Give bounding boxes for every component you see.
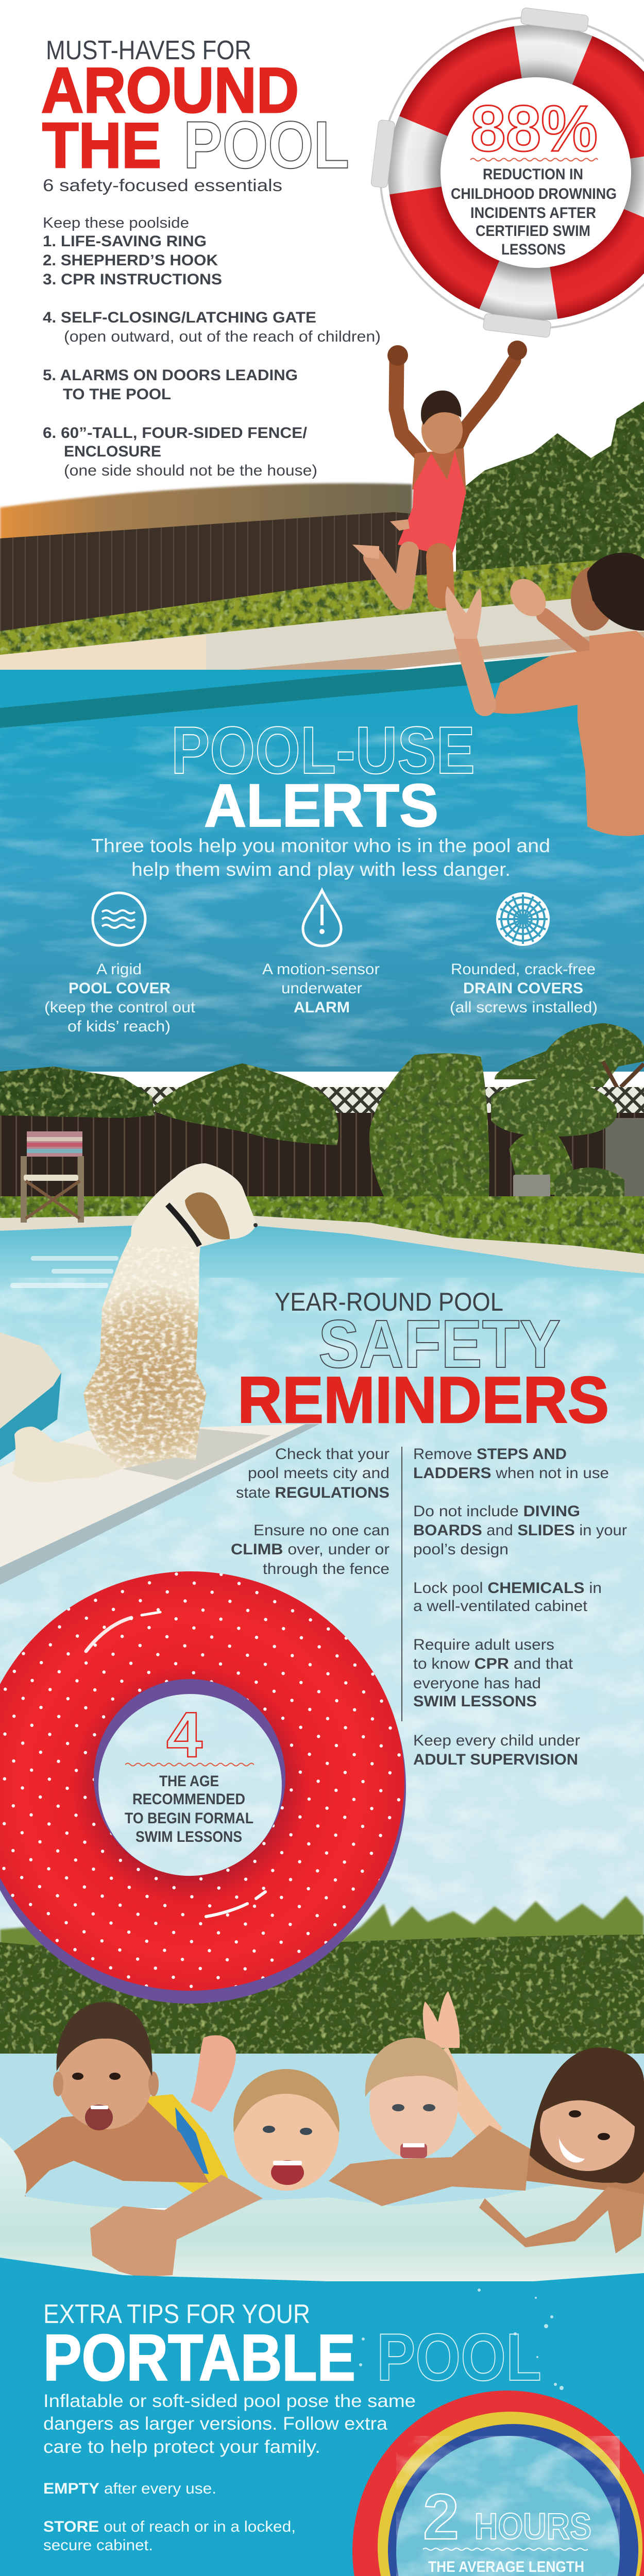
tool: alarm: A motion-sensor — [262, 961, 380, 978]
upper right tree — [495, 1023, 644, 1090]
reminders: left column: CLIMB over, under or — [231, 1541, 389, 1558]
reminders: right column — [413, 1446, 627, 1768]
intro text: portable pool dangers: care to help protect your family. — [43, 2437, 320, 2457]
stat caption: REDUCTION IN — [483, 166, 583, 183]
checklist: keep these poolside: TO THE POOL — [63, 386, 171, 403]
intro text: portable pool dangers: Inflatable or soft-sided pool pose the same — [43, 2391, 416, 2411]
floating red ring stat: age 4 — [0, 1571, 406, 2004]
reminders: right column: Do not include DIVING — [413, 1503, 580, 1520]
heading: year-round pool safety reminders: SAFETY — [318, 1306, 561, 1382]
reminders: left column: pool meets city and — [248, 1465, 389, 1482]
tool: drain covers: DRAIN COVERS — [463, 980, 583, 997]
checklist: keep these poolside: 2. SHEPHERD’S HOOK — [43, 252, 218, 269]
photo: dog sitting beside backyard pool — [0, 1023, 644, 1958]
heading: extra tips for your portable pool: POOL — [377, 2319, 541, 2395]
checklist: keep these poolside: 5. ALARMS ON DOORS LEADING — [43, 367, 298, 384]
tool: pool cover: A rigid — [96, 961, 142, 978]
stat caption: CHILDHOOD DROWNING — [451, 185, 617, 202]
checklist: keep these poolside — [43, 215, 381, 479]
checklist: keep these poolside: 3. CPR INSTRUCTIONS — [43, 271, 222, 288]
icon: pool cover waves — [93, 893, 145, 945]
stat caption: THE AGE — [159, 1773, 219, 1790]
raised foot and swim trunks — [144, 2035, 236, 2197]
stat caption: SWIM LESSONS — [135, 1828, 242, 1845]
deck — [0, 1424, 306, 1567]
child 1 — [0, 2002, 209, 2273]
heading: year-round pool safety reminders: YEAR-ROUND POOL — [275, 1287, 503, 1316]
heading: extra tips for your portable pool: EXTRA TIPS FOR YOUR — [43, 2299, 310, 2329]
checklist: keep these poolside: 4. SELF-CLOSING/LATCHING GATE — [43, 309, 316, 326]
heading: extra tips for your portable pool: PORTABLE — [43, 2321, 355, 2394]
stat caption — [125, 1773, 253, 1845]
reminders: right column: LADDERS when not in use — [413, 1465, 609, 1482]
portable pool tips list: STORE out of reach or in a locked, — [43, 2518, 296, 2535]
dog — [12, 1163, 258, 1482]
stat caption: RECOMMENDED — [132, 1791, 245, 1808]
reminders: left column: Check that your — [275, 1446, 389, 1463]
stat caption: LESSONS — [501, 241, 566, 258]
reminders: left column: through the fence — [263, 1561, 389, 1578]
intro text: portable pool dangers — [43, 2391, 416, 2457]
portable pool tips list: secure cabinet. — [43, 2537, 153, 2554]
round pool step — [0, 1372, 61, 1460]
checklist: keep these poolside: 6. 60”-TALL, FOUR-SIDED FENCE/ — [43, 425, 308, 442]
reminders: right column: pool’s design — [413, 1541, 509, 1558]
tool: drain covers: (all screws installed) — [450, 999, 598, 1016]
portable pool background — [0, 2258, 644, 2576]
stat caption: CERTIFIED SWIM — [476, 223, 590, 240]
heading: year-round pool safety reminders — [238, 1287, 609, 1436]
heading: pool-use alerts — [171, 713, 475, 840]
stat caption: THE AVERAGE LENGTH — [428, 2558, 584, 2575]
reminders: left column: Ensure no one can — [253, 1522, 389, 1539]
life ring stat: 88% — [355, 0, 644, 338]
title: must-haves for around the pool: 6 safety-focused essentials — [43, 176, 282, 195]
icon: drain cover — [496, 892, 550, 946]
inflatable pool rim — [0, 2137, 644, 2281]
kiddie pool stat: 2 hours — [352, 2391, 644, 2576]
intro text: three tools: Three tools help you monitor who is in the pool and — [91, 835, 550, 856]
title: must-haves for around the pool — [41, 36, 349, 195]
reminders: right column: to know CPR and that — [413, 1655, 573, 1672]
reminders: right column: Lock pool CHEMICALS in — [413, 1580, 602, 1597]
portable pool tips list — [43, 2480, 296, 2576]
tool: pool cover — [44, 961, 196, 1035]
icon: alarm drop — [303, 890, 341, 946]
reminders: left column: state REGULATIONS — [236, 1484, 389, 1501]
checklist: keep these poolside: ENCLOSURE — [64, 443, 161, 460]
reminders: right column: BOARDS and SLIDES in your — [413, 1522, 627, 1539]
heading: extra tips for your portable pool — [43, 2299, 541, 2395]
photo: girl jumping into pool with father — [0, 341, 644, 1072]
title: must-haves for around the pool: THE — [42, 110, 161, 181]
reminders: right column: ADULT SUPERVISION — [413, 1751, 578, 1768]
tool: alarm: underwater — [281, 980, 362, 997]
heading: pool-use alerts: ALERTS — [204, 772, 438, 840]
stat number: 4 — [166, 1700, 202, 1771]
child 2 — [90, 2069, 530, 2277]
reminders: right column: everyone has had — [413, 1675, 541, 1692]
tool: pool cover: of kids’ reach) — [67, 1018, 171, 1035]
reminders: right column: a well-ventilated cabinet — [413, 1598, 588, 1615]
tool: pool cover: (keep the control out — [44, 999, 196, 1016]
director's chair — [24, 1131, 82, 1223]
intro text: portable pool dangers: dangers as larger versions. Follow extra — [43, 2414, 388, 2434]
stat caption — [451, 166, 617, 258]
tool: drain covers: Rounded, crack-free — [451, 961, 596, 978]
tool: alarm: ALARM — [294, 999, 350, 1016]
girl — [352, 341, 527, 600]
reminders: right column: SWIM LESSONS — [413, 1693, 537, 1710]
heading: year-round pool safety reminders: REMINDERS — [238, 1363, 609, 1436]
tool: pool cover: POOL COVER — [69, 980, 171, 997]
stat caption: INCIDENTS AFTER — [470, 205, 596, 222]
heading: pool-use alerts: POOL-USE — [171, 713, 475, 788]
title: must-haves for around the pool: POOL — [183, 107, 349, 182]
kiddie pool stat: 2 hours: HOURS — [474, 2506, 591, 2547]
reminders: left column — [231, 1446, 389, 1578]
title: must-haves for around the pool: AROUND — [41, 55, 299, 126]
tool: alarm — [262, 961, 380, 1016]
child 4 — [479, 2047, 644, 2253]
intro text: three tools — [91, 835, 550, 880]
stat number: 2 — [423, 2481, 459, 2553]
checklist: keep these poolside: (open outward, out of the reach of children) — [64, 328, 381, 345]
stat number: 88% — [470, 92, 598, 165]
father — [445, 553, 644, 836]
reminders: right column: Remove STEPS AND — [413, 1446, 567, 1463]
tool: drain covers — [450, 961, 598, 1016]
intro text: three tools: help them swim and play with less danger. — [131, 859, 511, 880]
photo: grass hedge and children in inflatable pool — [0, 1896, 644, 2281]
child 3 — [365, 1991, 502, 2159]
portable pool tips list: EMPTY after every use. — [43, 2480, 216, 2497]
checklist: keep these poolside: 1. LIFE-SAVING RING — [43, 233, 207, 250]
checklist: keep these poolside: (one side should not be the house) — [64, 462, 317, 479]
title: must-haves for around the pool: MUST-HAVES FOR — [46, 36, 251, 65]
checklist: keep these poolside: Keep these poolside — [43, 215, 189, 231]
stat caption: TO BEGIN FORMAL — [125, 1810, 253, 1827]
reminders: right column: Keep every child under — [413, 1732, 580, 1749]
reminders: right column: Require adult users — [413, 1636, 554, 1653]
